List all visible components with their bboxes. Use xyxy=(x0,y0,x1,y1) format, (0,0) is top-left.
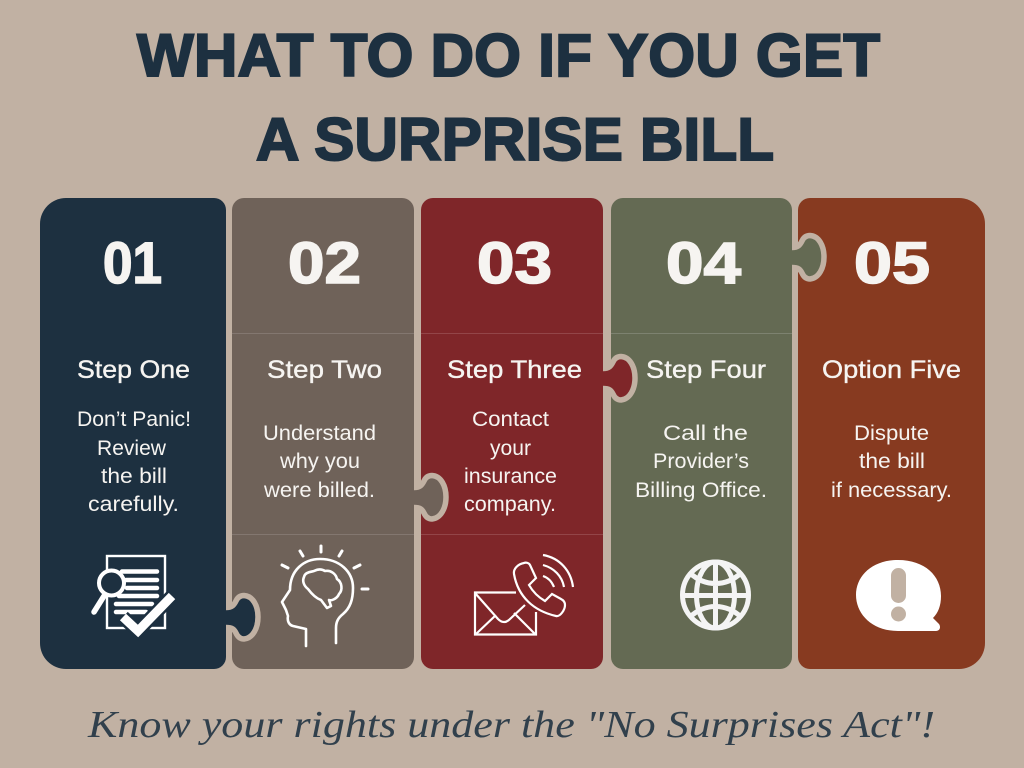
connector: puzzle tab 3 to 4 xyxy=(602,356,635,400)
number 05: 05 xyxy=(854,231,930,296)
connector: puzzle tab 2 to 3 xyxy=(413,476,446,519)
number 02: 02 xyxy=(288,231,361,296)
connector: puzzle tab 4 to 5 xyxy=(791,236,824,279)
number 04: 04 xyxy=(666,231,741,296)
heading: step four: Step Four xyxy=(646,356,766,384)
number 03: 03 xyxy=(477,231,552,296)
text: step 2 description: were billed. xyxy=(263,478,375,502)
title: WHAT TO DO IF YOU GET xyxy=(137,22,880,89)
text: step 4 description: Billing Office. xyxy=(635,478,767,502)
panel: step 4 xyxy=(611,198,824,669)
text: step 3 description xyxy=(464,407,557,516)
text: step 4 description xyxy=(635,421,767,502)
heading: step three: Step Three xyxy=(447,356,582,384)
text: step 2 description xyxy=(263,421,376,502)
text: step 1 description: Don’t Panic! xyxy=(77,407,191,431)
text: step 3 description: company. xyxy=(464,492,556,516)
connector: puzzle tab 1 to 2 xyxy=(225,596,258,639)
title: A SURPRISE BILL xyxy=(256,106,774,173)
text: step 4 description: Provider’s xyxy=(653,449,749,473)
text: step 3 description: insurance xyxy=(464,464,557,488)
text: step 5 description: if necessary. xyxy=(831,478,952,502)
icon: envelope and phone xyxy=(475,555,573,634)
icon: head with brain xyxy=(282,546,368,646)
text: step 1 description xyxy=(77,407,191,516)
title xyxy=(137,22,880,173)
text: step 1 description: carefully. xyxy=(88,492,179,516)
heading: step two: Step Two xyxy=(267,356,382,384)
panel: step 1 xyxy=(40,198,258,669)
text: step 5 description xyxy=(831,421,952,502)
text: step 1 description: Review xyxy=(97,436,166,460)
text: step 5 description: Dispute xyxy=(854,421,929,445)
icon: speech bubble with exclamation mark xyxy=(856,560,941,631)
heading: option five: Option Five xyxy=(822,356,961,384)
text: step 3 description: Contact xyxy=(472,407,549,431)
text: step 5 description: the bill xyxy=(859,449,925,473)
text: step 2 description: Understand xyxy=(263,421,376,445)
text: step 3 description: your xyxy=(490,436,531,460)
panel: step 3 xyxy=(421,198,635,669)
text: step 1 description: the bill xyxy=(101,464,167,488)
icon: globe xyxy=(682,562,749,628)
heading: step one: Step One xyxy=(77,356,190,384)
panel: step 2 xyxy=(232,198,446,669)
text: step 4 description: Call the xyxy=(663,421,748,445)
tagline: Know your rights under the "No Surprises Act"! xyxy=(87,704,935,746)
icon: document with magnifier and check mark xyxy=(94,556,172,631)
number 01: 01 xyxy=(103,231,162,296)
panel: step 5 xyxy=(798,198,985,669)
text: step 2 description: why you xyxy=(279,449,360,473)
